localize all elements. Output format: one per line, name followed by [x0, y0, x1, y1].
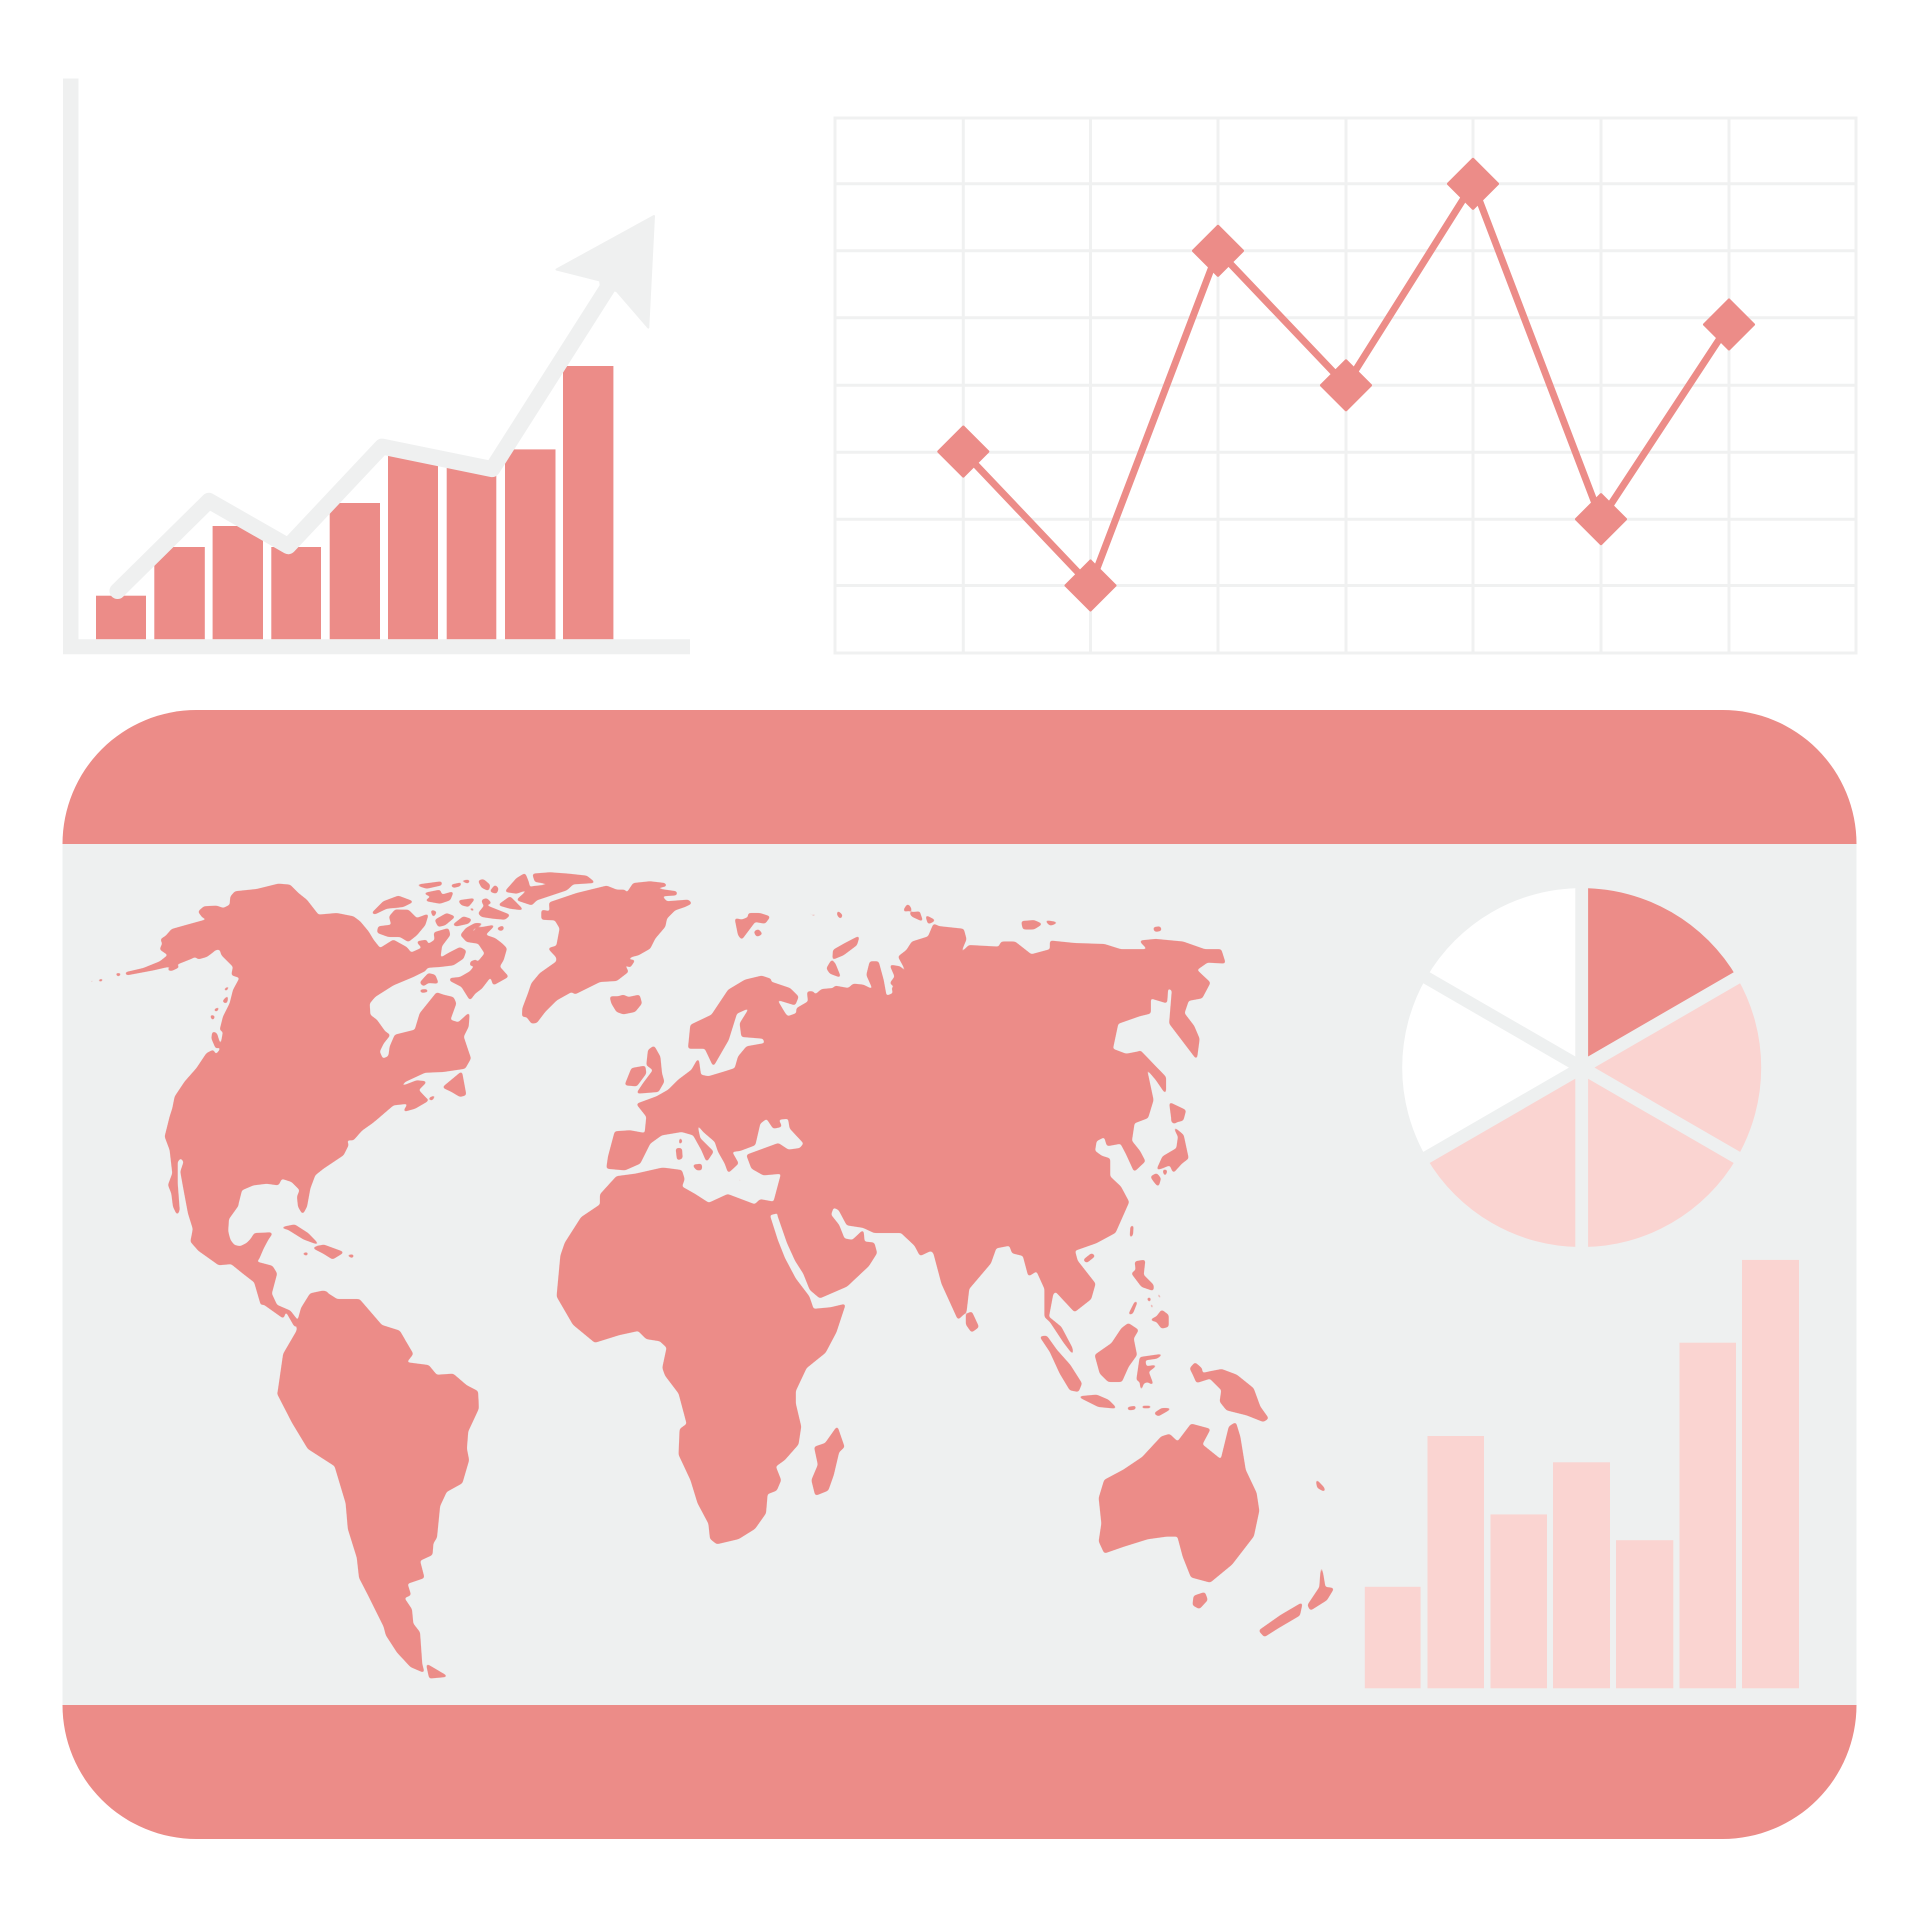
pie chart: [1402, 880, 1761, 1255]
bars: [96, 366, 613, 639]
panel frame with coloured bands: [62, 710, 1856, 1839]
continent: asia: [778, 905, 1225, 1355]
panel: map dashboard: [62, 710, 1856, 1839]
continent: europe: [607, 904, 920, 1200]
pie slices: light: [1426, 978, 1761, 1247]
small bar chart: [1365, 1260, 1799, 1688]
continent: africa and madagascar: [557, 1168, 845, 1544]
islands: japan and southeast asia: [1040, 1120, 1268, 1422]
data point markers: [939, 159, 1754, 610]
pie slice: highlighted: [1582, 888, 1737, 1068]
data line: [963, 184, 1729, 586]
panel: line chart on grid: [835, 118, 1856, 653]
pie slices: white: [1402, 888, 1582, 1157]
panel: growth bar chart with arrow: [63, 78, 690, 654]
panel body: [62, 844, 1856, 1705]
chart axes: [63, 78, 690, 654]
continent: south america: [278, 1291, 479, 1678]
greenland and iceland: [522, 882, 692, 1093]
world map: [89, 873, 1334, 1678]
continent: north america: [89, 873, 595, 1328]
continent: australia and new zealand: [1099, 1422, 1334, 1637]
trend arrow: [118, 216, 654, 591]
chart grid: [835, 118, 1856, 653]
